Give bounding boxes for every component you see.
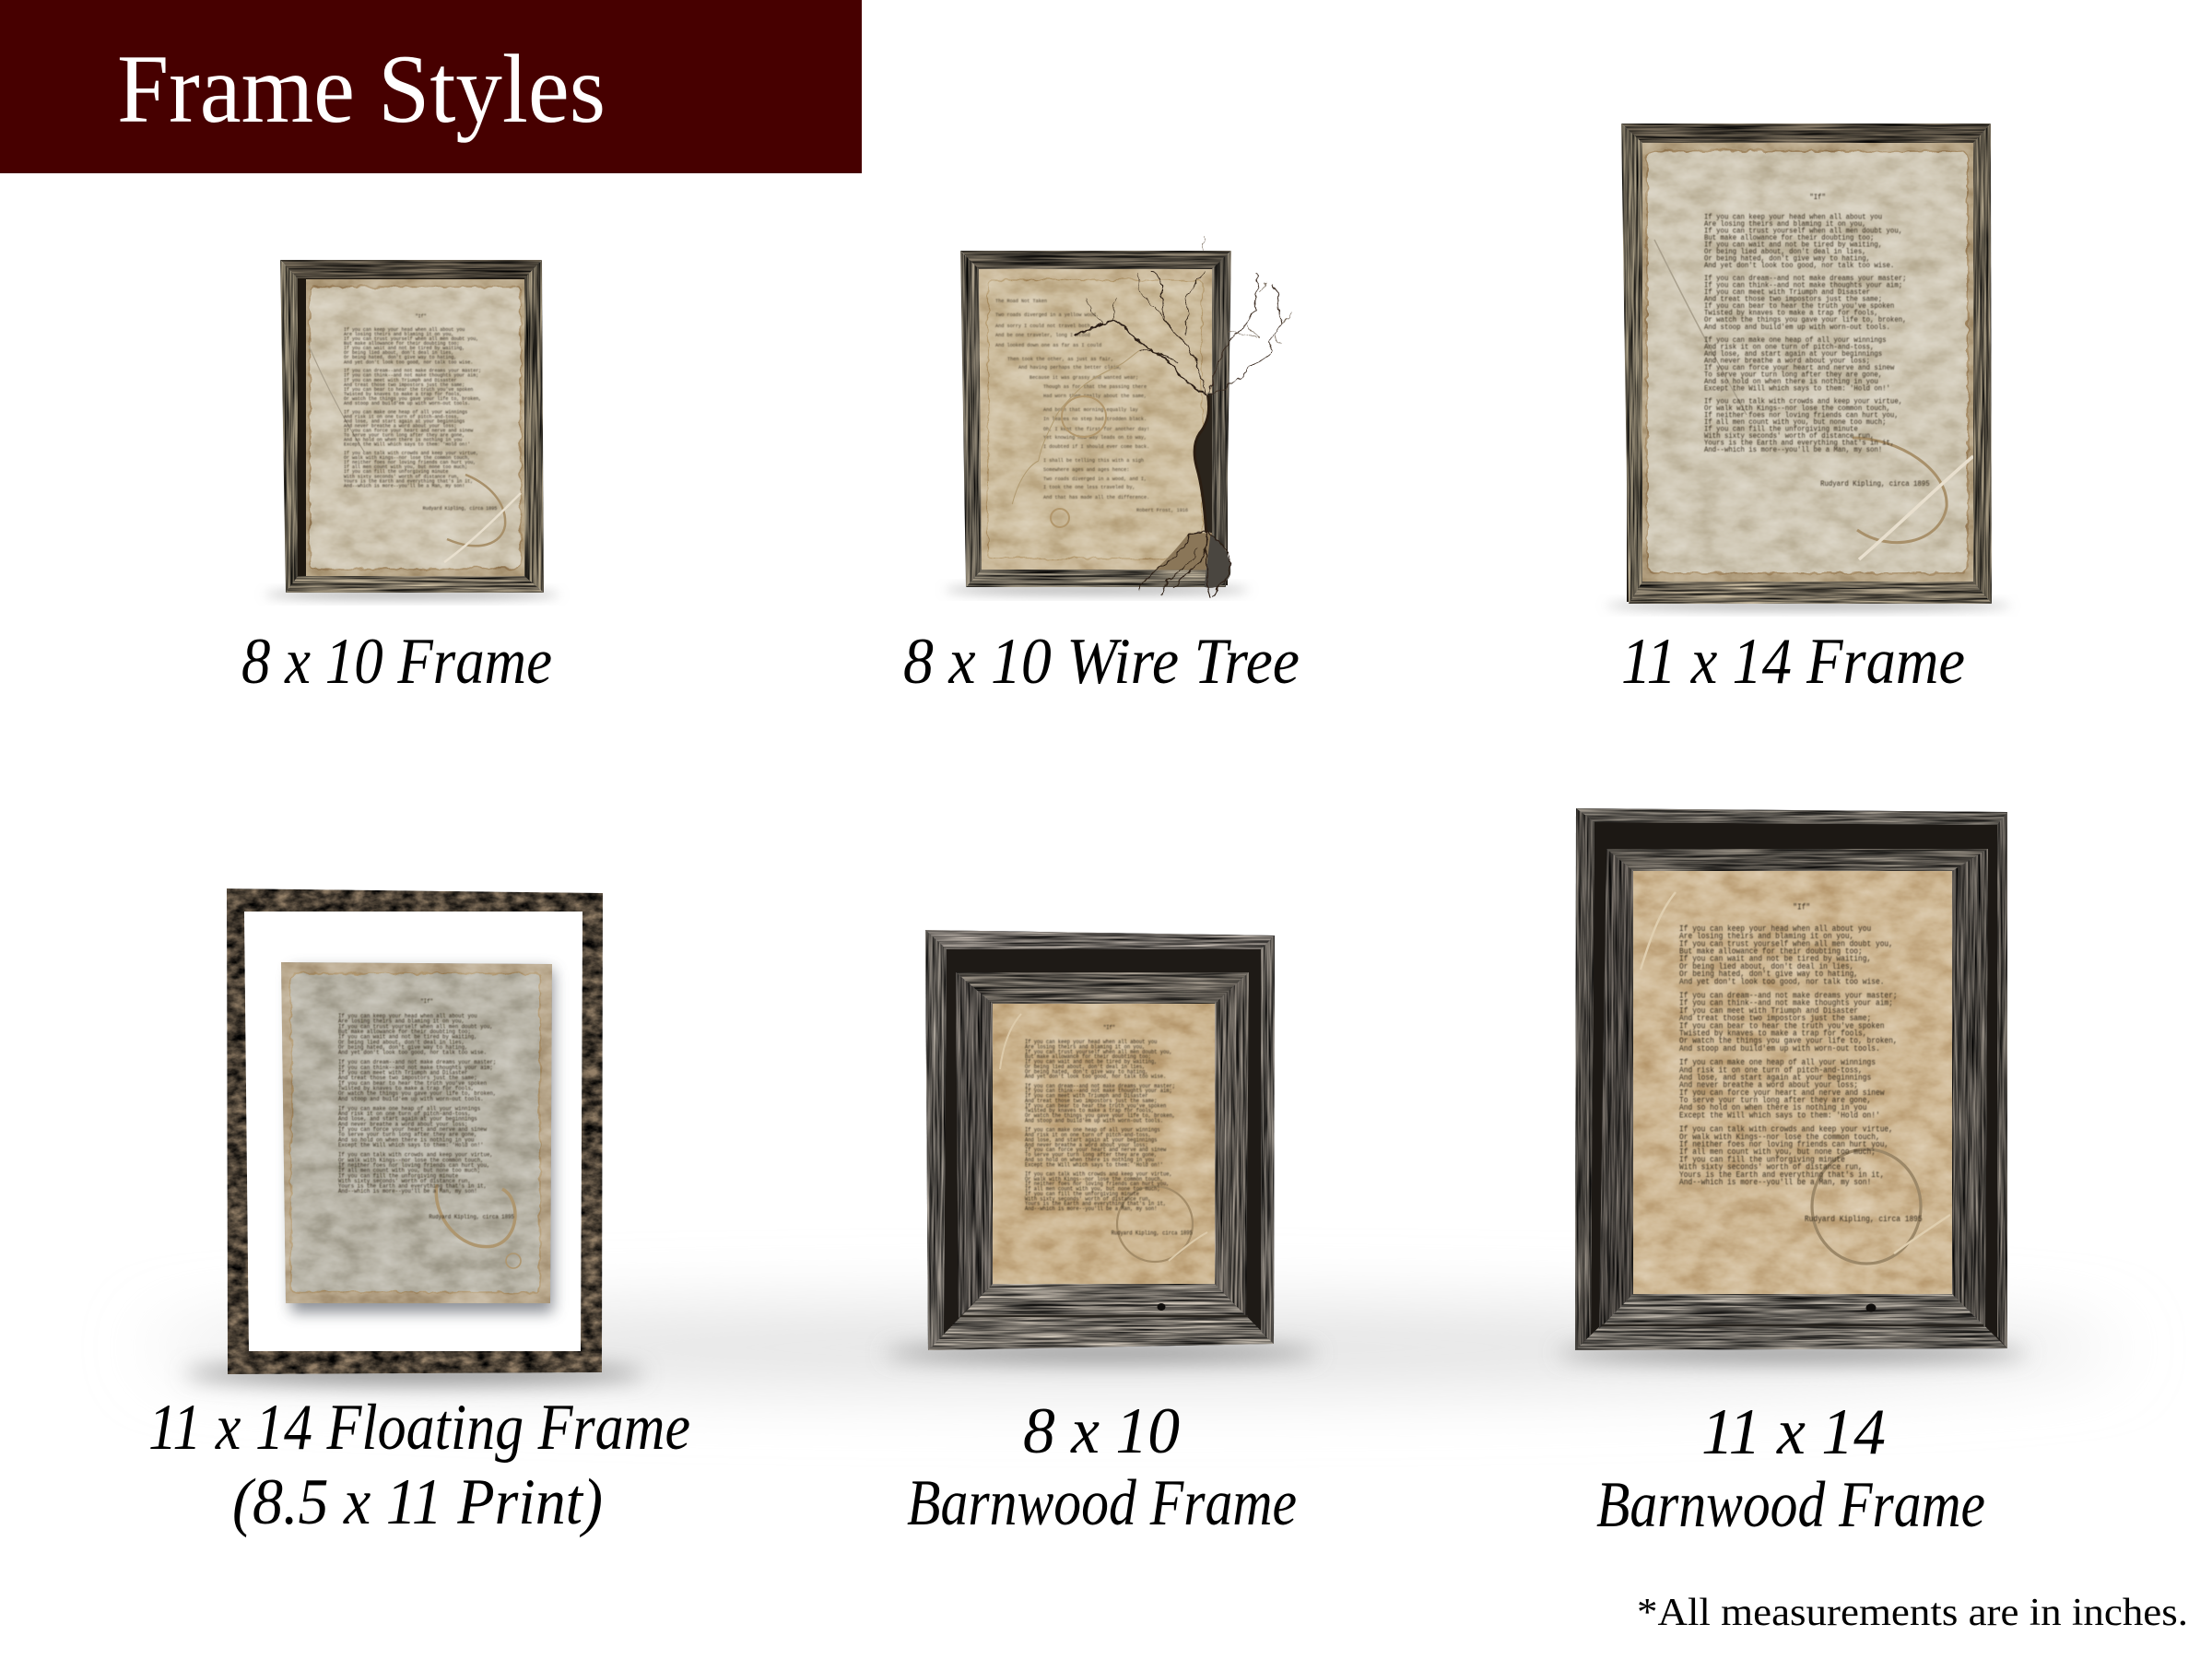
poem text: And yet don't look too good, nor talk too wise. — [338, 1049, 487, 1056]
poem text: Somewhere ages and ages hence: — [1043, 467, 1129, 473]
poem text: Two roads diverged in a wood, and I, — [1043, 477, 1147, 482]
poem text: And that has made all the difference. — [1043, 495, 1149, 500]
poem text: Except the Will which says to them: 'Hold on!' — [338, 1142, 484, 1148]
poem text: If you can bear to hear the truth you've spoken — [344, 387, 473, 393]
poem text: If neither foes nor loving friends can hurt you, — [1025, 1181, 1169, 1187]
poem text: Yours is the Earth and everything that's in it, — [1025, 1200, 1166, 1207]
poem text: But make allowance for their doubting too; — [1704, 234, 1874, 242]
label: 8 x 10 Frame: 8 x 10 Frame — [241, 626, 552, 698]
poem text: Or watch the things you gave your life to, broken, — [1704, 316, 1906, 324]
poem text: If all men count with you, but none too much; — [1679, 1147, 1876, 1157]
poem text: "If" — [420, 998, 433, 1005]
poem text: If you can keep your head when all about you — [1025, 1039, 1157, 1045]
poem text: Or walk with Kings--nor lose the common touch, — [338, 1157, 484, 1163]
poem text: And stoop and build'em up with worn-out tools. — [1679, 1043, 1880, 1053]
poem text: If you can trust yourself when all men doubt you, — [338, 1023, 493, 1030]
poem text: Or watch the things you gave your life to, broken, — [1025, 1112, 1175, 1119]
poem text: If you can think--and not make thoughts your aim; — [1025, 1088, 1172, 1094]
poem text: If you can fill the unforgiving minute — [344, 469, 448, 475]
poem text: Robert Frost, 1916 — [1136, 508, 1188, 513]
poem text: With sixty seconds' worth of distance run, — [1025, 1195, 1151, 1202]
poem text: And stoop and build'em up with worn-out tools. — [1704, 323, 1890, 332]
poem text: And so hold on when there is nothing in you — [344, 437, 462, 443]
icon: wire tree — [1012, 237, 1293, 597]
poem text: If all men count with you, but none too much; — [1704, 418, 1887, 427]
poem text: If you can think--and not make thoughts your aim; — [1679, 998, 1893, 1008]
poem text: Two roads diverged in a yellow wood, — [995, 312, 1099, 318]
title banner — [0, 0, 862, 173]
poem text: With sixty seconds' worth of distance run, — [338, 1178, 471, 1184]
poem text: Or being hated, don't give way to hating, — [1025, 1068, 1148, 1075]
poem text: If you can force your heart and nerve and sinew — [1704, 363, 1895, 372]
poem text: "If" — [416, 313, 427, 320]
poem text: And lose, and start again at your beginnings — [344, 418, 465, 425]
poem text: If neither foes nor loving friends can hurt you, — [344, 460, 476, 465]
poem text: With sixty seconds' worth of distance run, — [1704, 432, 1874, 441]
panel: 11 x 14 Floating Frame — [227, 888, 603, 1374]
poem text: And never breathe a word about your loss; — [1025, 1141, 1148, 1148]
poem text: If you can force your heart and nerve and sinew — [1025, 1147, 1167, 1153]
poem text: If you can talk with crowds and keep your virtue, — [338, 1151, 493, 1159]
poem text: If you can dream--and not make dreams your master; — [338, 1059, 496, 1065]
label: 8 x 10 Wire Tree: 8 x 10 Wire Tree — [903, 626, 1300, 698]
poem text: Yet knowing how way leads on to way, — [1043, 435, 1147, 441]
label: 11 x 14 Barnwood Frame: 11 x 14 — [1701, 1396, 1886, 1468]
poem text: And both that morning equally lay — [1043, 407, 1138, 413]
aged paper — [1642, 143, 1973, 582]
poem text — [995, 299, 1188, 513]
poem text: And--which is more--you'll be a Man, my son! — [1679, 1177, 1871, 1187]
heading: Frame Styles: Frame Styles — [117, 35, 606, 143]
mottled wood frame — [227, 888, 603, 1374]
poem text: If you can force your heart and nerve and sinew — [338, 1126, 487, 1133]
paper drop shadow — [291, 970, 553, 1312]
poem text: Or walk with Kings--nor lose the common touch, — [1704, 405, 1890, 413]
wood frame — [960, 251, 1231, 587]
poem text: But make allowance for their doubting too; — [344, 341, 459, 347]
footnote: *All measurements are in inches. — [1637, 1592, 2188, 1634]
poem text: With sixty seconds' worth of distance run, — [1679, 1162, 1863, 1172]
label: 11 x 14 Floating Frame: (8.5 x 11 Print) — [232, 1466, 603, 1538]
poem text: And never breathe a word about your loss; — [338, 1121, 467, 1128]
poem text: And lose, and start again at your beginnings — [1025, 1136, 1157, 1144]
stain and crease — [1654, 240, 1973, 559]
poem text: Except the Will which says to them: 'Hold on!' — [1704, 384, 1890, 394]
poem text: Yours is the Earth and everything that's in it, — [1679, 1170, 1884, 1180]
poem text: If all men count with you, but none too much; — [344, 465, 467, 470]
poem text: But make allowance for their doubting too; — [1679, 947, 1863, 957]
poem text: If you can talk with crowds and keep your virtue, — [1025, 1171, 1172, 1178]
poem text: Yours is the Earth and everything that's in it, — [344, 478, 473, 484]
poem text: And having perhaps the better claim, — [1018, 365, 1122, 371]
poem text: With sixty seconds' worth of distance run, — [344, 474, 459, 479]
poem text: And looked down one as far as I could — [995, 343, 1101, 348]
poem text: If you can bear to hear the truth you've spoken — [338, 1080, 487, 1087]
poem text: Or being hated, don't give way to hating, — [1679, 970, 1858, 979]
poem text: If you can make one heap of all your winnings — [1679, 1058, 1876, 1067]
poem text: And never breathe a word about your loss; — [1704, 357, 1870, 366]
poem text: If you can dream--and not make dreams your master; — [1679, 991, 1898, 1001]
poem text: If you can force your heart and nerve and sinew — [1679, 1088, 1885, 1098]
poem text: Except the Will which says to them: 'Hold on!' — [1025, 1161, 1163, 1168]
label: 8 x 10 Barnwood Frame: 8 x 10 — [1023, 1395, 1180, 1467]
poem text: In leaves no step had trodden black. — [1043, 417, 1147, 422]
poem text: If you can bear to hear the truth you've spoken — [1704, 302, 1895, 311]
poem text: If you can keep your head when all about you — [1679, 924, 1871, 934]
poem text: I shall be telling this with a sigh — [1043, 458, 1144, 464]
poem text — [344, 313, 497, 512]
poem text — [1025, 1024, 1193, 1237]
poem text: If you can trust yourself when all men doubt you, — [1025, 1048, 1172, 1055]
poem text: And so hold on when there is nothing in you — [1025, 1157, 1154, 1163]
poem text: If neither foes nor loving friends can hurt you, — [1704, 411, 1899, 420]
label: 11 x 14 Floating Frame: 11 x 14 Floating Frame — [148, 1392, 690, 1464]
stain and crease — [309, 346, 521, 562]
poem text: Are losing theirs and blaming it on you, — [1025, 1043, 1145, 1051]
coffee rings — [436, 1184, 521, 1268]
poem text: If you can wait and not be tired by waiting, — [1025, 1058, 1157, 1065]
poem text: Or being lied about, don't deal in lies, — [1679, 961, 1853, 971]
poem text: To serve your turn long after they are gone, — [1704, 371, 1882, 380]
poem text: Or being lied about, don't deal in lies, — [1025, 1064, 1145, 1070]
poem text: If you can dream--and not make dreams your master; — [1025, 1083, 1175, 1089]
poem text: Or walk with Kings--nor lose the common touch, — [1025, 1175, 1163, 1182]
poem text: And yet don't look too good, nor talk too wise. — [1704, 262, 1894, 270]
wood frame — [280, 260, 544, 593]
poem text: If you can trust yourself when all men doubt you, — [344, 336, 478, 342]
poem text: Are losing theirs and blaming it on you, — [344, 332, 453, 337]
poem text: If you can wait and not be tired by waiting, — [344, 346, 465, 351]
poem text: And risk it on one turn of pitch-and-toss, — [344, 414, 459, 420]
poem text: Because it was grassy and wanted wear; — [1030, 375, 1138, 381]
poem text: If you can dream--and not make dreams your master; — [344, 368, 481, 374]
poem text: Are losing theirs and blaming it on you, — [338, 1018, 465, 1025]
poem text: And lose, and start again at your beginnings — [1704, 349, 1882, 359]
label: 8 x 10 Barnwood Frame — [907, 1395, 1297, 1539]
poem text: Or being hated, don't give way to hating, — [344, 355, 456, 360]
coffee ring and crease — [1000, 1014, 1207, 1262]
panel: 8 x 10 Wire Tree — [945, 237, 1293, 597]
poem text: Or being lied about, don't deal in lies, — [338, 1039, 465, 1045]
poem text — [338, 998, 514, 1220]
poem text: And risk it on one turn of pitch-and-toss, — [1679, 1065, 1863, 1076]
poem text: And lose, and start again at your beginnings — [338, 1115, 477, 1123]
poem text: If you can wait and not be tired by waiting, — [1704, 241, 1882, 250]
poem text: I doubted if I should ever come back. — [1043, 444, 1149, 450]
panel: 8 x 10 Barnwood Frame — [925, 930, 1275, 1350]
poem text: Oh, I kept the first for another day! — [1043, 427, 1149, 432]
poem text: Or being hated, don't give way to hating, — [338, 1044, 467, 1051]
poem text: And risk it on one turn of pitch-and-toss, — [338, 1111, 471, 1117]
poem text: If neither foes nor loving friends can hurt you, — [1679, 1139, 1888, 1149]
coffee stains — [1051, 396, 1106, 527]
poem text: Yours is the Earth and everything that's in it, — [1704, 439, 1894, 448]
poem text: If you can force your heart and nerve and sinew — [344, 428, 474, 434]
poem text: If you can talk with crowds and keep your virtue, — [344, 451, 478, 456]
poem text: If you can meet with Triumph and Disaster — [1025, 1092, 1148, 1100]
poem text: Or watch the things you gave your life to, broken, — [338, 1090, 496, 1097]
poem text: If you can meet with Triumph and Disaster — [1704, 288, 1870, 297]
poem text: Are losing theirs and blaming it on you, — [1704, 220, 1866, 229]
poem text: And sorry I could not travel both — [995, 324, 1090, 329]
label: 8 x 10 Barnwood Frame: Barnwood Frame — [907, 1467, 1297, 1539]
poem text: Rudyard Kipling, circa 1895 — [423, 506, 497, 512]
poem text: Are losing theirs and blaming it on you, — [1679, 932, 1853, 941]
panel: 8 x 10 Frame — [265, 260, 559, 598]
poem text: And yet don't look too good, nor talk too wise. — [1679, 977, 1884, 987]
poem text: Or walk with Kings--nor lose the common touch, — [344, 455, 470, 461]
label: 11 x 14 Frame: 11 x 14 Frame — [1621, 626, 1965, 698]
poem text: Or being hated, don't give way to hating, — [1704, 254, 1870, 264]
poem text: And yet don't look too good, nor talk too wise. — [344, 359, 473, 365]
poem text: If you can make one heap of all your winnings — [1025, 1126, 1160, 1134]
poem text: Twisted by knaves to make a trap for fools, — [344, 392, 462, 397]
poem text: And treat those two impostors just the same; — [338, 1075, 477, 1081]
panel: 11 x 14 Barnwood Frame — [1575, 808, 2007, 1350]
poem text: And stoop and build'em up with worn-out tools. — [338, 1096, 484, 1102]
poem text: If you can meet with Triumph and Disaster — [338, 1069, 468, 1077]
poem text: Rudyard Kipling, circa 1895 — [1112, 1230, 1193, 1237]
poem text: To serve your turn long after they are gone, — [1025, 1151, 1157, 1159]
label: 11 x 14 Barnwood Frame — [1596, 1396, 1985, 1541]
poem text: If neither foes nor loving friends can hurt you, — [338, 1162, 489, 1169]
barnwood frame — [925, 930, 1275, 1350]
poem text: If you can wait and not be tired by waiting, — [338, 1033, 477, 1041]
poem text: "If" — [1103, 1024, 1115, 1031]
poem text: If all men count with you, but none too much; — [1025, 1185, 1160, 1193]
label: 11 x 14 Floating Frame — [148, 1392, 690, 1538]
poem text: If you can fill the unforgiving minute — [1679, 1155, 1845, 1165]
poem text: If you can dream--and not make dreams your master; — [1704, 275, 1906, 283]
poem text: And treat those two impostors just the same; — [1704, 295, 1882, 304]
poem text: If you can talk with crowds and keep your virtue, — [1704, 397, 1902, 406]
poem text: And so hold on when there is nothing in you — [1704, 377, 1878, 386]
aged paper — [993, 1004, 1215, 1284]
poem text: If you can bear to hear the truth you've spoken — [1679, 1021, 1884, 1031]
poem text: Except the Will which says to them: 'Hold on!' — [344, 441, 470, 448]
poem text: If you can fill the unforgiving minute — [1704, 425, 1858, 434]
poem text: And stoop and build'em up with worn-out tools. — [344, 401, 470, 406]
poem text: To serve your turn long after they are gone, — [338, 1131, 477, 1138]
poem text: If you can wait and not be tired by waiting, — [1679, 954, 1871, 964]
poem text: If you can think--and not make thoughts your aim; — [344, 372, 478, 379]
poem text: And risk it on one turn of pitch-and-toss, — [1025, 1132, 1151, 1138]
poem text: If you can meet with Triumph and Disaster — [344, 377, 456, 383]
poem text: If you can trust yourself when all men doubt you, — [1704, 227, 1902, 236]
poem text: And never breathe a word about your loss; — [1679, 1080, 1858, 1090]
poem text: "If" — [1809, 194, 1826, 202]
poem text: Except the Will which says to them: 'Hold on!' — [1679, 1111, 1880, 1121]
poem text: Or being lied about, don't deal in lies, — [344, 350, 453, 356]
aged paper — [979, 269, 1212, 570]
poem text: If you can keep your head when all about you — [1704, 213, 1882, 222]
poem text: And treat those two impostors just the same; — [344, 382, 465, 388]
poem text: And--which is more--you'll be a Man, my son! — [1704, 446, 1882, 454]
aged paper — [281, 962, 552, 1303]
poem text: And treat those two impostors just the same; — [1025, 1098, 1157, 1104]
poem text: If you can keep your head when all about you — [338, 1013, 477, 1019]
poem text: Or watch the things you gave your life to, broken, — [344, 396, 481, 402]
wood frame — [1621, 124, 1992, 604]
aged paper — [306, 279, 525, 576]
poem text: Though as for that the passing there — [1043, 384, 1147, 390]
poem text: And stoop and build'em up with worn-out tools. — [1025, 1117, 1163, 1124]
poem text: If you can fill the unforgiving minute — [338, 1172, 458, 1179]
poem text: And treat those two impostors just the same; — [1679, 1014, 1871, 1023]
barnwood frame — [1575, 808, 2007, 1350]
poem text: And be one traveler, long I stood — [995, 333, 1090, 338]
poem text: And--which is more--you'll be a Man, my son! — [1025, 1206, 1157, 1212]
poem text: And--which is more--you'll be a Man, my son! — [338, 1188, 477, 1194]
poem text: Rudyard Kipling, circa 1895 — [429, 1214, 514, 1220]
poem text: If you can fill the unforgiving minute — [1025, 1191, 1139, 1197]
panel: 11 x 14 Frame — [1606, 124, 2011, 609]
poem text: If you can think--and not make thoughts your aim; — [338, 1065, 493, 1071]
poem text: If you can make one heap of all your winnings — [1704, 335, 1887, 345]
aged paper — [1633, 871, 1952, 1294]
poem text: Yours is the Earth and everything that's in it, — [338, 1182, 487, 1190]
poem text: If you can meet with Triumph and Disaster — [1679, 1006, 1858, 1016]
poem text: Twisted by knaves to make a trap for fools, — [338, 1085, 474, 1092]
poem text: Or walk with Kings--nor lose the common touch, — [1679, 1132, 1880, 1142]
coffee ring and crease — [1641, 892, 1950, 1264]
label: 11 x 14 Barnwood Frame: Barnwood Frame — [1596, 1469, 1985, 1541]
poem text: And never breathe a word about your loss; — [344, 423, 456, 429]
poem text — [1679, 902, 1923, 1224]
poem text: If you can make one heap of all your winnings — [338, 1105, 480, 1112]
poem text: To serve your turn long after they are gone, — [1679, 1095, 1871, 1105]
poem text: And lose, and start again at your beginnings — [1679, 1073, 1871, 1083]
poem text: If all men count with you, but none too much; — [338, 1167, 480, 1174]
poem text: Twisted by knaves to make a trap for fools, — [1704, 309, 1878, 318]
poem text — [1704, 194, 1930, 488]
poem text: Or watch the things you gave your life to, broken, — [1679, 1036, 1898, 1046]
poem text: Then took the other, as just as fair, — [1007, 357, 1113, 362]
poem text: If you can trust yourself when all men doubt you, — [1679, 939, 1893, 949]
poem text: Rudyard Kipling, circa 1895 — [1820, 480, 1930, 488]
poem text: To serve your turn long after they are gone, — [344, 432, 465, 439]
poem text: Twisted by knaves to make a trap for fools, — [1679, 1029, 1867, 1039]
poem text: If you can make one heap of all your winnings — [344, 409, 467, 416]
poem text: Or being lied about, don't deal in lies, — [1704, 248, 1866, 256]
poem text: The Road Not Taken — [995, 299, 1047, 304]
poem text: Rudyard Kipling, circa 1895 — [1805, 1215, 1923, 1224]
poem text: If you can keep your head when all about you — [344, 327, 465, 333]
poem text: "If" — [1793, 902, 1810, 912]
poem text: But make allowance for their doubting too; — [1025, 1053, 1151, 1060]
poem text: If you can think--and not make thoughts your aim; — [1704, 281, 1902, 290]
poem text: I took the one less traveled by, — [1043, 485, 1135, 490]
poem text: If you can bear to hear the truth you've spoken — [1025, 1102, 1166, 1109]
poem text: But make allowance for their doubting too; — [338, 1029, 471, 1035]
poem text: And yet don't look too good, nor talk too wise. — [1025, 1073, 1166, 1080]
poem text: And so hold on when there is nothing in you — [338, 1136, 475, 1144]
poem text: If you can talk with crowds and keep your virtue, — [1679, 1124, 1893, 1135]
poem text: And risk it on one turn of pitch-and-toss, — [1704, 343, 1874, 352]
poem text: And--which is more--you'll be a Man, my son! — [344, 483, 465, 489]
poem text: Twisted by knaves to make a trap for fools, — [1025, 1107, 1154, 1114]
poem text: And so hold on when there is nothing in you — [1679, 1103, 1867, 1112]
poem text: Had worn them really about the same, — [1043, 394, 1147, 399]
